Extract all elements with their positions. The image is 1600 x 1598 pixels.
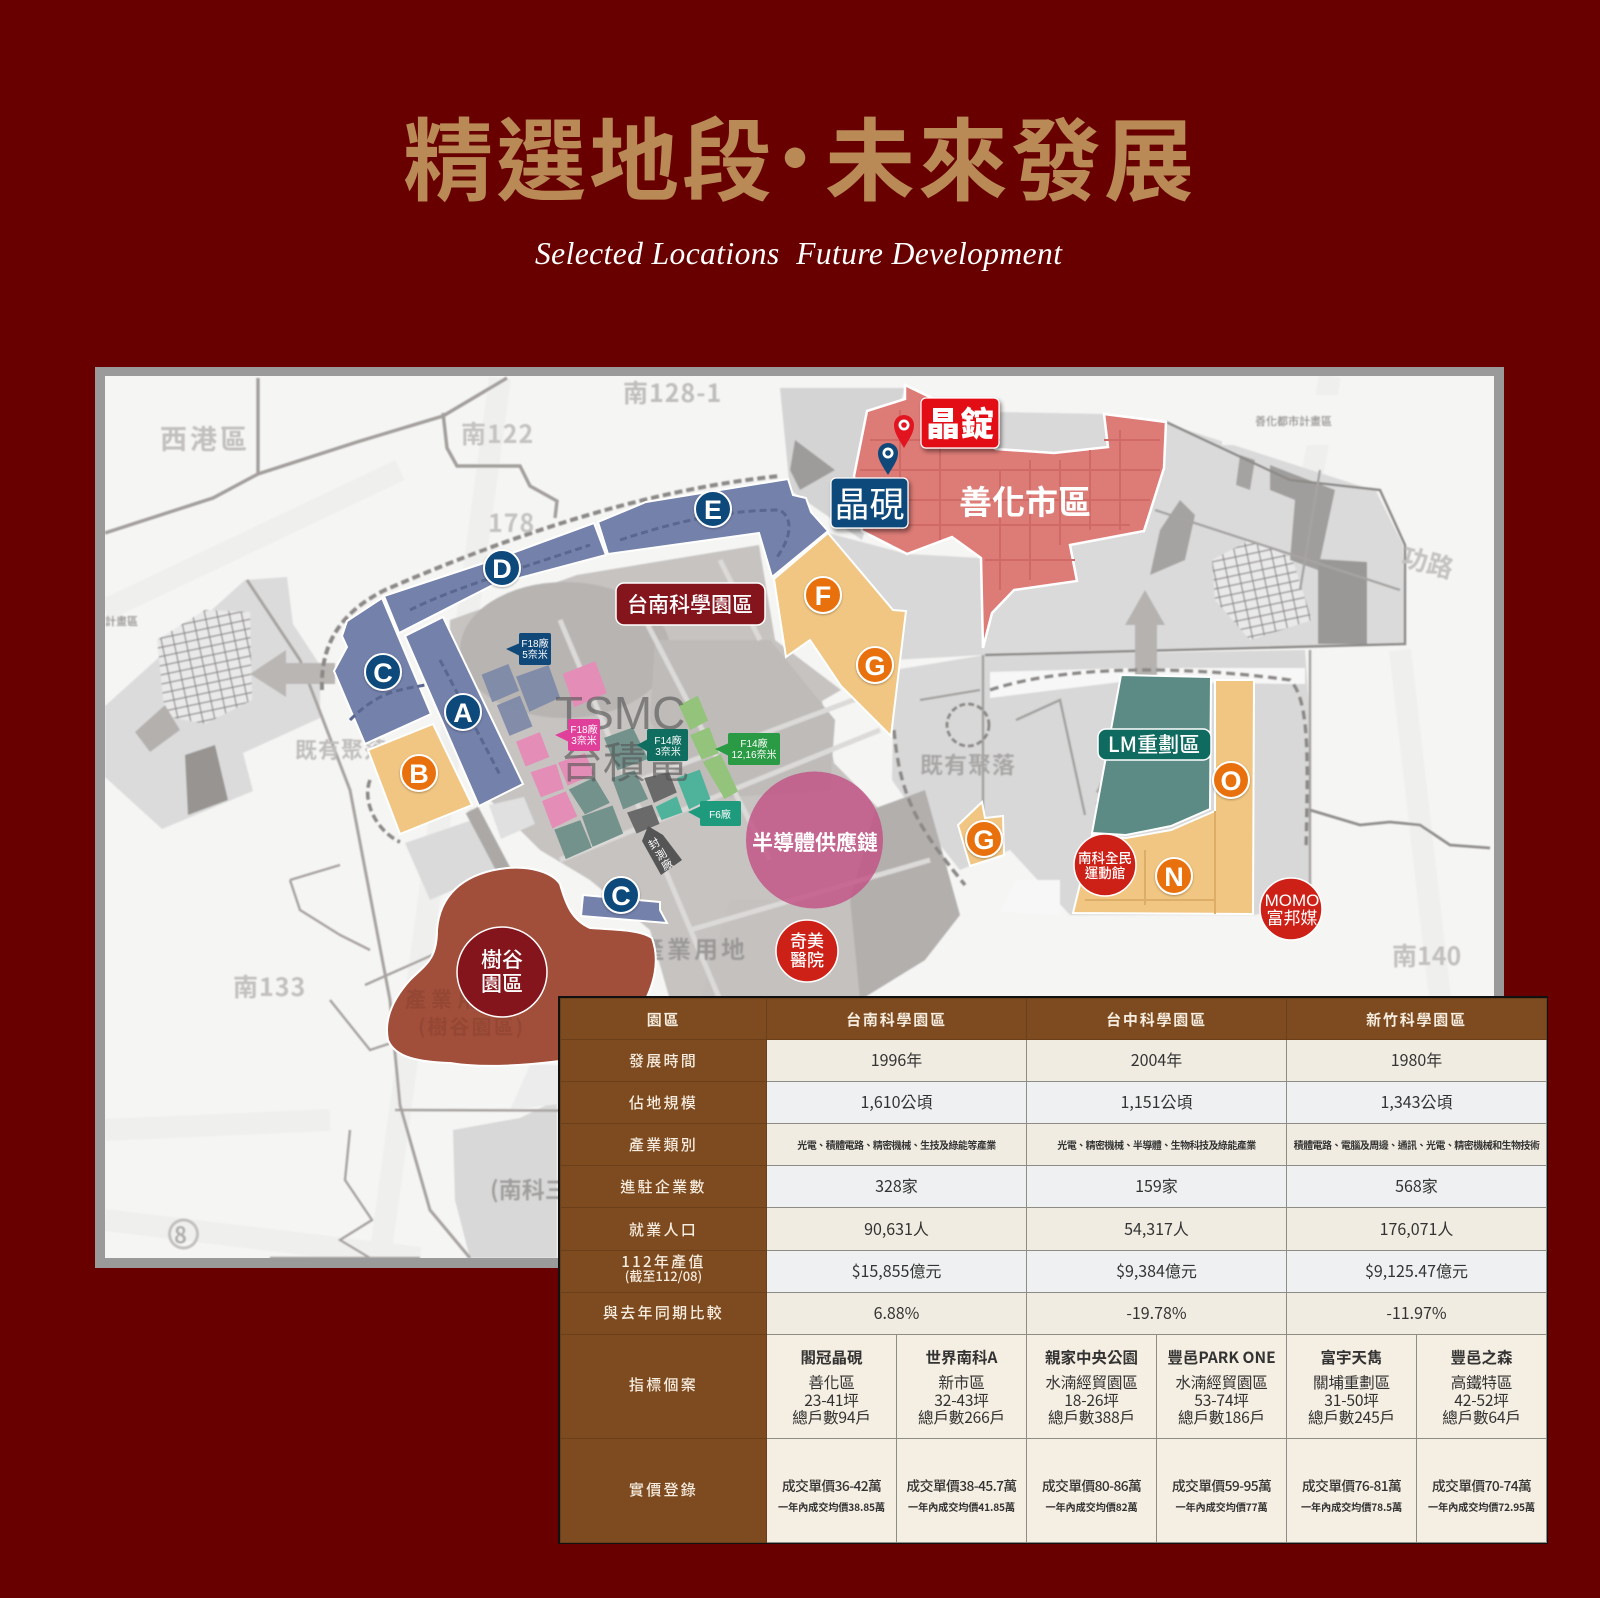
row: featured projects: 富宇天雋: [1320, 1346, 1382, 1368]
map frame: [95, 367, 1504, 1268]
row: development date: [561, 1040, 1442, 1081]
row: companies: [561, 1166, 1546, 1207]
row: output value: $15,855億元: [852, 1258, 941, 1282]
row: year on year: 6.88%: [874, 1300, 919, 1324]
row: site area: 1,610公頃: [861, 1089, 932, 1113]
row: companies: 568家: [1395, 1173, 1438, 1197]
row: registered prices: 成交單價38-45.7萬: [906, 1474, 1017, 1494]
factory blocks: [482, 661, 738, 859]
tag: packaging plant: [642, 826, 682, 875]
label: Jingyan: 晶硯: [834, 477, 905, 528]
tag: F18 3nm: [555, 719, 600, 751]
markers: zone letters: O: [1220, 766, 1242, 796]
marker: sports centre: [1074, 834, 1136, 896]
panel: map: [105, 374, 1494, 1258]
marker: Shugu park: [457, 927, 547, 1017]
faded map labels: 南133: [233, 968, 306, 1004]
row: site area: 佔地規模: [629, 1092, 698, 1113]
faded map labels: 計畫區: [105, 613, 138, 629]
panel: map: (樹谷園區): [418, 1011, 525, 1040]
row: registered prices: 成交單價80-86萬: [1042, 1474, 1141, 1494]
tag: F6: [688, 801, 741, 826]
row: registered prices: 成交單價59-95萬: [1172, 1474, 1271, 1494]
markers: zone letters: E: [704, 495, 722, 525]
label: Shanhua downtown: 善化市區: [959, 476, 1091, 524]
tag: F14 12/16nm: 12,16奈米: [731, 748, 777, 761]
row: featured projects: 總戶數245戶: [1308, 1406, 1395, 1428]
row: output value: 112年產值: [621, 1251, 706, 1272]
row: registered prices: 一年內成交均價78.5萬: [1301, 1498, 1402, 1514]
row: featured projects: 豐邑之森: [1450, 1346, 1512, 1368]
row: development date: 發展時間: [629, 1050, 698, 1071]
tag: F14 12/16nm: [715, 733, 780, 765]
faded map labels: (南科三: [490, 1171, 568, 1205]
faded map labels: 西港區: [160, 418, 250, 457]
faded map labels: 既有聚落: [295, 733, 387, 765]
label: Tainan Science Park: 台南科學園區: [627, 589, 753, 619]
row: registered prices: [561, 1439, 1535, 1542]
row: featured projects: 總戶數64戶: [1442, 1406, 1521, 1428]
marker: Shugu park: 樹谷: [481, 944, 523, 974]
row: featured projects: 總戶數388戶: [1048, 1406, 1135, 1428]
row: employment: 90,631人: [864, 1216, 929, 1240]
icon: development arrows: [250, 650, 335, 697]
row: employment: 54,317人: [1124, 1216, 1189, 1240]
row: featured projects: 水湳經貿園區: [1175, 1371, 1268, 1393]
table header row: 台中科學園區: [1106, 1008, 1207, 1030]
zone: B: [368, 724, 472, 834]
row: site area: 1,151公頃: [1121, 1089, 1192, 1113]
row: development date: 2004年: [1131, 1047, 1182, 1071]
marker: sports centre: 運動館: [1085, 862, 1125, 882]
base map: [105, 374, 1490, 1258]
park boundary dashes: [322, 476, 780, 690]
markers: zone letters: G: [864, 651, 886, 681]
row: registered prices: 成交單價36-42萬: [782, 1474, 881, 1494]
tag: F18 3nm: F18廠: [570, 723, 598, 736]
tag: packaging plant: 廠: [658, 855, 676, 874]
marker: sports centre: 南科全民: [1078, 847, 1132, 867]
row: employment: [561, 1208, 1453, 1250]
TSMC label: [556, 696, 688, 782]
row: featured projects: 新市區: [938, 1371, 985, 1393]
tag: F18 3nm: 3奈米: [571, 734, 597, 747]
markers: zone letters: N: [1164, 862, 1184, 892]
row: output value: $9,384億元: [1116, 1258, 1197, 1282]
zone: D: [384, 523, 606, 633]
marker: MOMO: [1260, 878, 1322, 940]
faded map labels: 善化都市計畫區: [1255, 413, 1332, 429]
row: registered prices: 成交單價70-74萬: [1432, 1474, 1531, 1494]
row: featured projects: 閣冠晶硯: [800, 1346, 862, 1368]
row: featured projects: 關埔重劃區: [1313, 1371, 1390, 1393]
label: LM zone: LM重劃區: [1108, 729, 1200, 759]
row: industries: 光電、精密機械、半導體、生物科技及綠能產業: [1057, 1137, 1256, 1152]
row: featured projects: 水湳經貿園區: [1045, 1371, 1138, 1393]
row: companies: 進駐企業數: [620, 1176, 707, 1197]
zone: A: [405, 617, 523, 806]
icon: blue pin: [878, 443, 898, 475]
marker: Chimei hospital: [776, 920, 838, 982]
row: featured projects: 總戶數94戶: [792, 1406, 871, 1428]
row: companies: 328家: [875, 1173, 918, 1197]
row: featured projects: 善化區: [808, 1371, 855, 1393]
markers: zone letters: G: [973, 825, 995, 855]
markers: zone letters: D: [492, 554, 512, 584]
icon: red pin: [894, 415, 914, 448]
row: year on year: -19.78%: [1126, 1300, 1187, 1324]
row: industries: [561, 1124, 1540, 1165]
tag: packaging plant: 測: [652, 845, 670, 864]
row: registered prices: 一年內成交均價72.95萬: [1428, 1498, 1535, 1514]
panel: map: 產業用地: [405, 984, 509, 1014]
table header row: [561, 999, 1546, 1542]
markers: zone letters: F: [815, 581, 831, 611]
faded map labels: [105, 374, 1461, 1250]
row: registered prices: 一年內成交均價38.85萬: [778, 1498, 885, 1514]
table header row: 台南科學園區: [846, 1008, 947, 1030]
zone: E: [598, 479, 828, 577]
faded map labels: 南128-1: [623, 374, 722, 410]
title: 未來發展: [825, 89, 1197, 219]
tag: F18 5nm: F18廠: [521, 637, 549, 650]
row: featured projects: 親家中央公園: [1045, 1346, 1138, 1368]
row: featured projects: 高鐵特區: [1451, 1371, 1512, 1393]
tag: F6: F6廠: [709, 808, 731, 821]
faded map labels: 既有聚落: [920, 746, 1016, 780]
row: featured projects: 53-74坪: [1194, 1389, 1249, 1411]
row: featured projects: 42-52坪: [1454, 1389, 1509, 1411]
row: output value: $9,125.47億元: [1365, 1258, 1468, 1282]
faded map labels: 功路: [1398, 537, 1458, 586]
row: featured projects: 世界南科A: [926, 1346, 997, 1368]
zone: N and O: [1073, 680, 1254, 914]
tag: F18 5nm: 5奈米: [522, 648, 548, 661]
title: ·: [755, 96, 838, 212]
marker: MOMO: 富邦媒: [1266, 909, 1318, 928]
faded map labels: 南122: [461, 415, 534, 451]
zone: LM: [1092, 675, 1211, 835]
subtitle: Selected Locations Future Development: [535, 236, 1063, 271]
TSMC label: 台積電: [560, 729, 689, 791]
row: site area: [561, 1082, 1546, 1123]
row: registered prices: 實價登錄: [629, 1478, 698, 1500]
title: 精選地段: [403, 89, 775, 219]
row: industries: 產業類別: [629, 1134, 698, 1155]
tag: F14 12/16nm: F14廠: [740, 737, 768, 750]
tag: F14 3nm: 3奈米: [655, 745, 681, 758]
semiconductor supply chain circle: [746, 772, 883, 908]
markers: zone letters: C: [611, 881, 631, 911]
row: employment: 就業人口: [629, 1218, 698, 1240]
table header row: 園區: [647, 1008, 680, 1030]
row: featured projects: [561, 1335, 1521, 1438]
roads: [105, 378, 557, 533]
row: featured projects: 23-41坪: [804, 1389, 859, 1411]
tag: F14 3nm: F14廠: [654, 734, 682, 747]
faded map labels: 南140: [1392, 937, 1461, 973]
row: featured projects: 總戶數186戶: [1178, 1406, 1265, 1428]
row: year on year: 與去年同期比較: [603, 1302, 724, 1323]
row: registered prices: 一年內成交均價77萬: [1175, 1498, 1268, 1514]
markers: zone letters: C: [373, 658, 393, 688]
marker: Chimei hospital: 醫院: [790, 946, 824, 971]
row: development date: 1980年: [1391, 1047, 1442, 1071]
faded map labels: 產業用地: [640, 930, 748, 965]
row: featured projects: 31-50坪: [1324, 1389, 1379, 1411]
row: industries: 積體電路、電腦及周邊、通訊、光電、精密機械和生物技術: [1294, 1137, 1539, 1152]
table: science park comparison: [558, 996, 1548, 1544]
central park area: [450, 544, 878, 996]
row: featured projects: 總戶數266戶: [918, 1406, 1005, 1428]
zone: F and G: [774, 533, 906, 736]
row: companies: 159家: [1135, 1173, 1178, 1197]
markers: zone letters: [365, 491, 1249, 913]
marker: Shugu park: 園區: [481, 968, 523, 998]
row: output value: (截至112/08): [625, 1266, 702, 1285]
row: registered prices: 一年內成交均價41.85萬: [908, 1498, 1015, 1514]
row: year on year: -11.97%: [1386, 1300, 1447, 1324]
row: industries: 光電、積體電路、精密機械、生技及綠能等產業: [797, 1137, 996, 1152]
marker: Chimei hospital: 奇美: [790, 927, 824, 952]
row: output value: [561, 1251, 1546, 1292]
faded map labels: 生活服務: [1095, 775, 1191, 810]
row: employment: 176,071人: [1380, 1216, 1453, 1240]
row: featured projects: 豐邑PARK ONE: [1167, 1346, 1276, 1368]
marker: MOMO: MOMO: [1265, 891, 1319, 910]
row: site area: 1,343公頃: [1381, 1089, 1452, 1113]
label: Tainan Science Park: [616, 583, 765, 625]
faded map labels: 8: [174, 1218, 187, 1250]
faded map labels: 178: [488, 504, 535, 540]
row: featured projects: 32-43坪: [934, 1389, 989, 1411]
table header row: 新竹科學園區: [1366, 1008, 1467, 1030]
zone: C south: [581, 895, 667, 923]
row: registered prices: 一年內成交均價82萬: [1045, 1498, 1138, 1514]
zone: Shanhua downtown: [854, 385, 1166, 648]
title: [403, 89, 1197, 219]
zone: Shugu: [387, 868, 656, 1066]
markers: zone letters: A: [453, 698, 473, 728]
label: Jingding: 晶錠: [926, 397, 994, 446]
tag: F18 5nm: [506, 633, 551, 665]
semiconductor supply chain circle: 半導體供應鏈: [752, 827, 878, 857]
row: featured projects: 指標個案: [629, 1374, 698, 1394]
row: year on year: [561, 1293, 1447, 1334]
markers: zone letters: B: [409, 759, 429, 789]
row: registered prices: 成交單價76-81萬: [1302, 1474, 1401, 1494]
row: development date: 1996年: [871, 1047, 922, 1071]
row: featured projects: 18-26坪: [1064, 1389, 1119, 1411]
TSMC label: TSMC: [555, 687, 685, 739]
tag: F14 3nm: [637, 729, 688, 761]
zone: G small: [958, 802, 1004, 866]
zone: C: [334, 598, 431, 744]
tag: packaging plant: 封: [645, 834, 663, 853]
